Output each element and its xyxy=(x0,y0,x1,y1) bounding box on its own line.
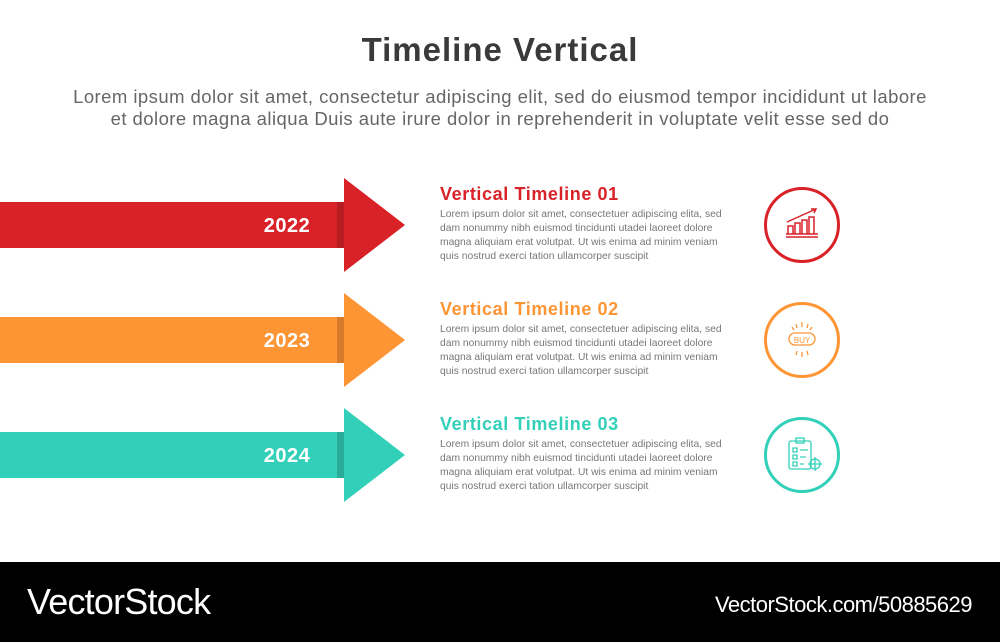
arrow 2023: 2023 xyxy=(264,330,310,352)
icon: buy circle xyxy=(766,304,838,376)
text block 02: Lorem ipsum dolor sit amet, consectetuer adipiscing elita, sed dam nonummy nibh euismod tincidunti utadei laoreet dolore magna aliquiam erat volutpat. Ut wis enima ad minim veniam quis nostrud exerci tation ullamcorper suscipit xyxy=(440,324,722,377)
subtitle: et dolore magna aliqua Duis aute irure dolor in reprehenderit in voluptate velit esse sed do xyxy=(111,108,889,129)
subtitle xyxy=(73,86,927,129)
icon: chart circle xyxy=(766,188,838,262)
subtitle: Lorem ipsum dolor sit amet, consectetur adipiscing elit, sed do eiusmod tempor incididunt ut labore xyxy=(73,86,927,107)
title: Timeline Vertical xyxy=(362,31,638,68)
arrow 2022 xyxy=(0,178,405,272)
footer xyxy=(0,562,1000,642)
text block 02: Vertical Timeline 02 xyxy=(440,299,619,319)
text block 03 xyxy=(440,414,722,492)
icon: buy circle: BUY xyxy=(794,336,811,345)
text block 01: Lorem ipsum dolor sit amet, consectetuer adipiscing elita, sed dam nonummy nibh euismod tincidunti utadei laoreet dolore magna aliquiam erat volutpat. Ut wis enima ad minim veniam quis nostrud exerci tation ullamcorper suscipit xyxy=(440,209,722,262)
footer url: VectorStock.com/50885629 xyxy=(715,592,972,617)
footer logo: VectorStock xyxy=(27,581,210,622)
text block 02 xyxy=(440,299,722,377)
text block 01 xyxy=(440,184,722,262)
icon: clipboard circle xyxy=(766,418,838,492)
text block 01: Vertical Timeline 01 xyxy=(440,184,619,204)
arrow 2024: 2024 xyxy=(264,445,311,467)
text block 03: Lorem ipsum dolor sit amet, consectetuer adipiscing elita, sed dam nonummy nibh euismod tincidunti utadei laoreet dolore magna aliquiam erat volutpat. Ut wis enima ad minim veniam quis nostrud exerci tation ullamcorper suscipit xyxy=(440,439,722,492)
arrow 2023 xyxy=(0,293,405,387)
arrow 2024 xyxy=(0,408,405,502)
text block 03: Vertical Timeline 03 xyxy=(440,414,619,434)
arrow 2022: 2022 xyxy=(264,215,310,237)
